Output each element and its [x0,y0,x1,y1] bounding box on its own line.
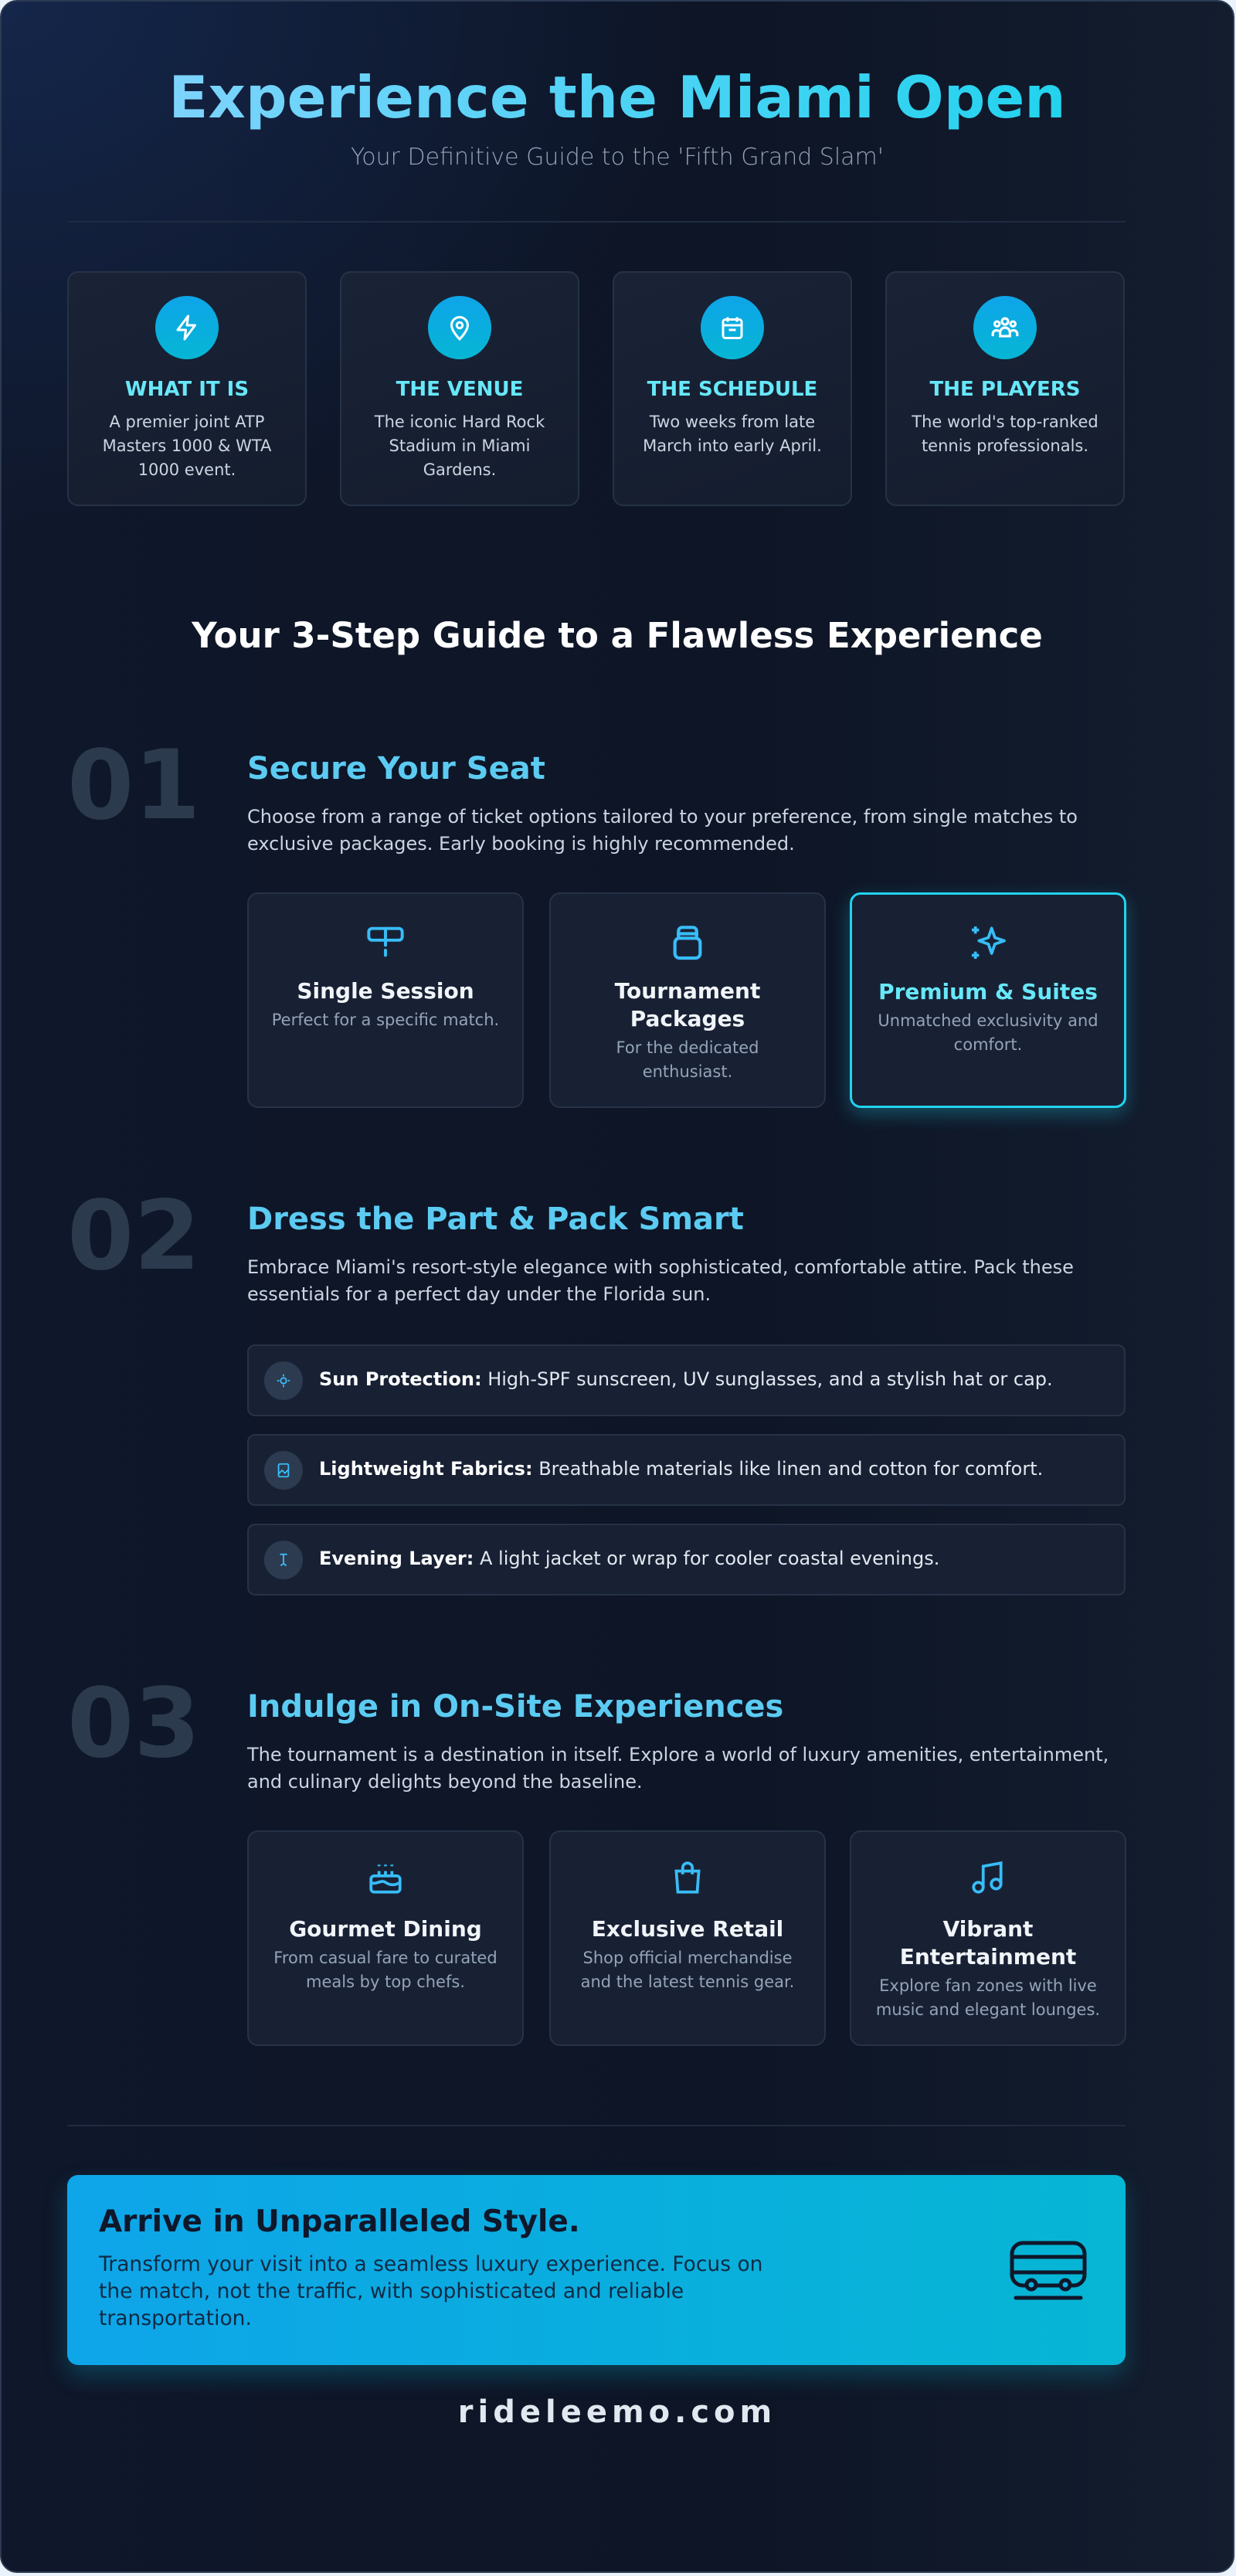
icon: hanger [264,1541,303,1579]
description: Embrace Miami's resort-style elegance with sophisticated, comfortable attire. Pack these essentials for a perfect day under the Florida sun. [247,1256,1074,1305]
icon: bag [674,926,701,960]
title: Premium & Suites [878,979,1098,1004]
icon: ticket [367,927,404,957]
item: lightweight fabrics [247,1434,1126,1506]
icon: cake [369,1864,402,1894]
card: single session [247,892,524,1108]
title: Vibrant [943,1916,1033,1942]
card: tournament packages [549,892,826,1108]
text: The world's top-ranked tennis professionals. [912,413,1098,455]
panel: venue [340,271,579,506]
number 02: 02 [67,1181,201,1292]
description: Choose from a range of ticket options tailored to your preference, from single matches to exclusive packages. Early booking is highly recommended. [247,806,1078,855]
subtitle: Unmatched exclusivity and comfort. [878,1011,1098,1054]
card: vibrant entertainment [850,1830,1126,2046]
panel: players [885,271,1125,506]
text: A premier joint ATP Masters 1000 & WTA 1000 event. [103,413,271,479]
heading: Indulge in On-Site Experiences [247,1689,783,1725]
title: Single Session [297,978,474,1004]
section heading: Your 3-Step Guide to a Flawless Experience [192,615,1043,656]
text: The iconic Hard Rock Stadium in Miami Gardens. [375,413,545,479]
subtitle: Your Definitive Guide to the 'Fifth Grand Slam' [351,144,884,171]
heading: Secure Your Seat [247,751,545,787]
callout text: Transform your visit into a seamless luxury experience. Focus on the match, not the traffic, with sophisticated and reliable transportation. [99,2252,762,2330]
step 1 [67,730,1136,1123]
text: Evening Layer: A light jacket or wrap for cooler coastal evenings. [319,1548,939,1569]
icon: lightning [155,296,219,359]
description: The tournament is a destination in itself. Explore a world of luxury amenities, entertainment, and culinary delights beyond the baseline. [247,1744,1109,1793]
title: Experience the Miami Open [168,63,1066,131]
step 3 [67,1668,1126,2046]
heading: Dress the Part & Pack Smart [247,1201,744,1237]
icon: sun [264,1361,303,1400]
heading: THE VENUE [396,378,523,401]
icon: sparkle [972,926,1006,959]
subtitle: For the dedicated enthusiast. [616,1038,759,1081]
title: Exclusive Retail [592,1916,783,1942]
title: Gourmet Dining [289,1916,482,1942]
footer: website: rideleemo.com [458,2394,776,2430]
icon: people [973,296,1037,359]
title [900,1916,1076,1969]
subtitle: Perfect for a specific match. [272,1011,499,1029]
callout: arrive in style [67,2175,1126,2365]
item: evening layer [247,1524,1126,1596]
icon: music [972,1861,1003,1894]
card: gourmet dining [247,1830,524,2046]
card: premium & suites [850,892,1126,1108]
heading: WHAT IT IS [125,378,249,401]
subtitle: From casual fare to curated meals by top chefs. [273,1949,497,1991]
subtitle: Explore fan zones with live music and elegant lounges. [876,1976,1100,2019]
text: Sun Protection: High-SPF sunscreen, UV sunglasses, and a stylish hat or cap. [319,1368,1053,1390]
panel: what it is [67,271,307,506]
item: sun protection [247,1344,1126,1416]
title [615,978,760,1031]
heading: THE PLAYERS [930,378,1080,401]
text: Two weeks from late March into early April. [643,413,822,455]
icon: shopping bag [674,1861,701,1894]
title: Packages [630,1006,745,1031]
step 2 [67,1181,1074,1305]
icon: calendar [701,296,764,359]
icon: image [264,1451,303,1490]
heading: THE SCHEDULE [647,378,817,401]
title: Entertainment [900,1944,1076,1969]
card: exclusive retail [549,1830,826,2046]
panel: schedule [613,271,852,506]
title: Tournament [615,978,760,1004]
text: Lightweight Fabrics: Breathable materials like linen and cotton for comfort. [319,1458,1043,1480]
icon: bus [1010,2241,1086,2299]
icon: pin [428,296,491,359]
number 03: 03 [67,1668,201,1779]
callout heading: Arrive in Unparalleled Style. [99,2204,580,2239]
number 01: 01 [67,730,201,841]
subtitle: Shop official merchandise and the latest tennis gear. [581,1949,794,1991]
